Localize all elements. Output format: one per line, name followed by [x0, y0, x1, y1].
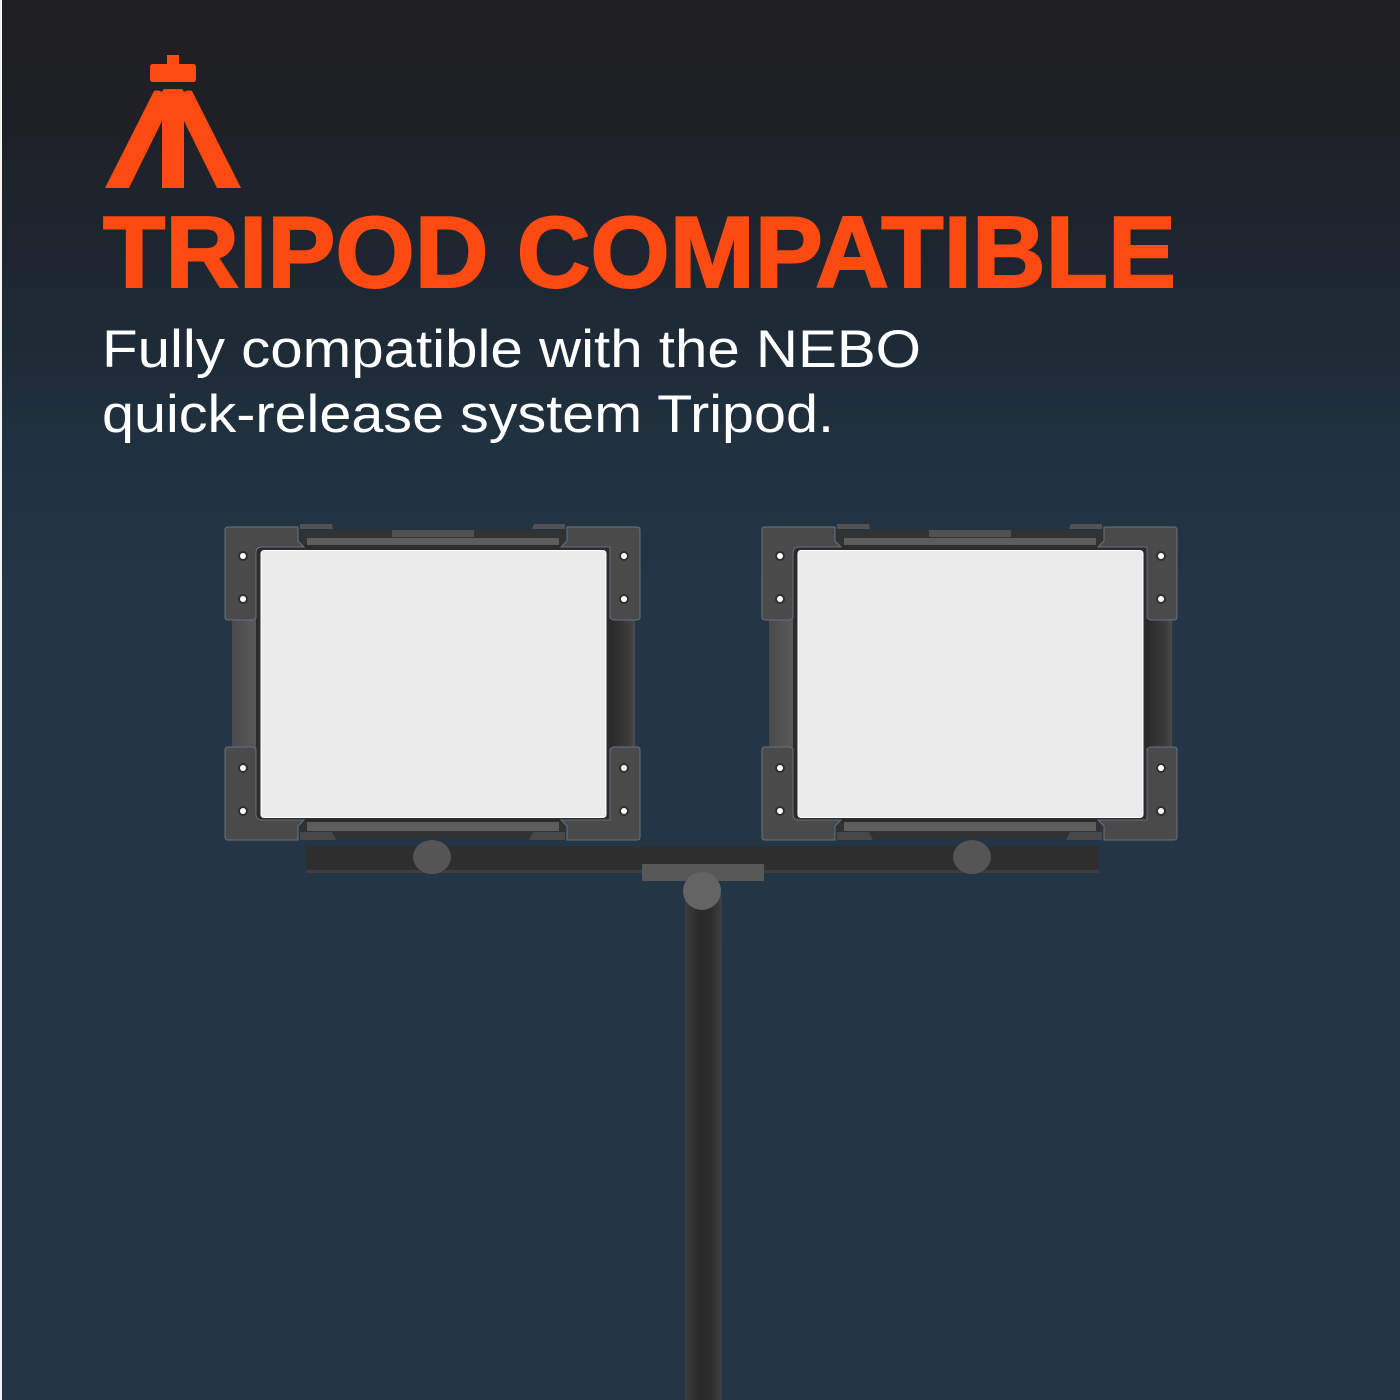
heading: TRIPOD COMPATIBLE: [103, 197, 1176, 309]
crossbar knob: right: [953, 840, 991, 874]
crossbar knob: left: [413, 840, 451, 874]
T-bracket: [642, 864, 764, 881]
light panel: left: [225, 524, 640, 840]
description text: quick-release system Tripod.: [102, 385, 834, 444]
crossbar: [306, 846, 1099, 873]
light panel: right: [762, 524, 1177, 840]
pole knob: [683, 872, 721, 910]
icon: tripod: [105, 55, 241, 188]
description text: [102, 320, 921, 444]
left edge strip: [0, 0, 2, 1400]
description text: Fully compatible with the NEBO: [102, 320, 921, 379]
tripod pole: [685, 895, 722, 1400]
